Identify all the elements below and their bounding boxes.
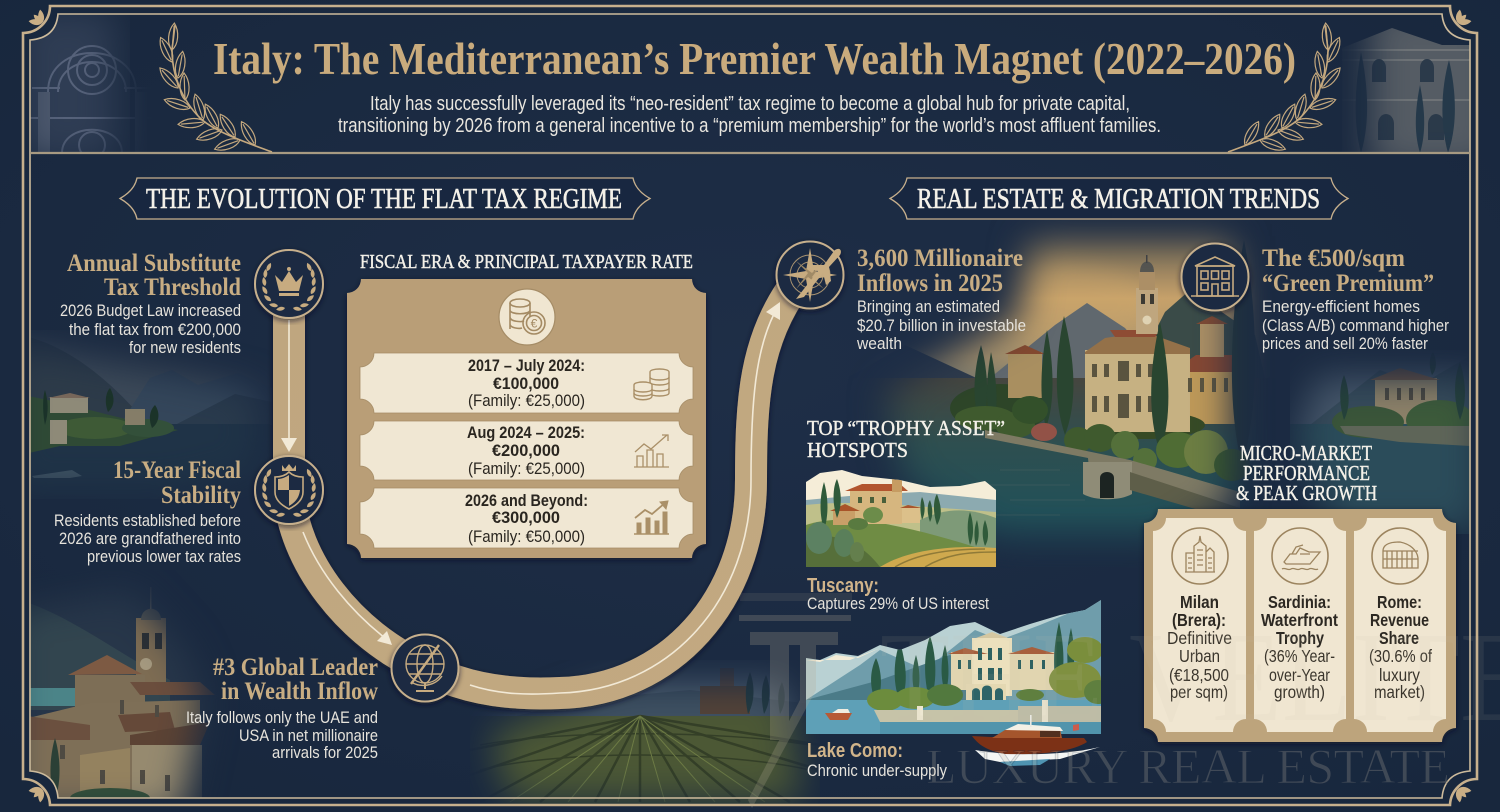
- banner: flat tax heading: [120, 178, 650, 219]
- watermark logo: [739, 593, 852, 808]
- icon: wooden motorboat: [972, 715, 1100, 766]
- row: Aug 2024 to 2025: (Family: €25,000): [468, 459, 585, 478]
- row: 2017 to July 2024: €100,000: [493, 374, 559, 393]
- text block: lake como: Chronic under-supply: [807, 762, 948, 780]
- text block: global leader in wealth inflow: arrivals for 2025: [272, 744, 378, 762]
- text block: millionaire inflows: 3,600 Millionaire: [857, 245, 1023, 272]
- banner: real estate heading: REAL ESTATE & MIGRATION TRENDS: [917, 183, 1320, 215]
- scene: vineyard: [481, 668, 812, 804]
- text block: 15-year fiscal stability: Stability: [161, 482, 241, 509]
- icon: villa medallion: [1182, 244, 1248, 310]
- heading: fiscal era: FISCAL ERA & PRINCIPAL TAXPAYER RATE: [360, 251, 693, 273]
- icon: crown medallion: [255, 250, 323, 318]
- icon: globe medallion: [392, 634, 458, 702]
- laurel: right header: [1228, 23, 1343, 153]
- card: sardinia: Trophy: [1276, 628, 1324, 648]
- illustration: lake como: [806, 600, 1112, 735]
- heading: micro-market performance: [1236, 441, 1377, 505]
- text block: global leader in wealth inflow: USA in net millionaire: [239, 727, 378, 745]
- row: Aug 2024 to 2025: €200,000: [492, 441, 560, 460]
- heading: trophy hotspots: [807, 416, 1005, 462]
- text block: annual substitute tax threshold: for new residents: [129, 339, 241, 357]
- banner: real estate heading: [890, 178, 1348, 219]
- row: Aug 2024 to 2025: [360, 421, 693, 480]
- text block: millionaire inflows: wealth: [856, 335, 902, 353]
- panel: micro-market cards: [1144, 509, 1456, 742]
- card: rome: market): [1374, 682, 1425, 702]
- card: sardinia: Sardinia:: [1268, 592, 1331, 612]
- text block: millionaire inflows: [856, 245, 1026, 353]
- text block: annual substitute tax threshold: Tax Threshold: [104, 274, 241, 301]
- heading: micro-market performance: MICRO-MARKET: [1240, 441, 1372, 465]
- text block: 15-year fiscal stability: Residents established before: [54, 512, 241, 530]
- card: milan: Urban: [1179, 646, 1220, 666]
- card: sardinia: (36% Year-: [1264, 646, 1335, 666]
- text block: lake como: Lake Como:: [807, 740, 903, 762]
- icon: coin stack: €: [531, 316, 538, 330]
- text block: green premium: The €500/sqm: [1262, 245, 1405, 272]
- title: Italy: The Mediterranean’s Premier Wealth Magnet (2022–2026): [213, 33, 1296, 84]
- card: sardinia: [1254, 518, 1346, 732]
- text block: tuscany: Captures 29% of US interest: [807, 595, 989, 613]
- scene: left lake: [30, 339, 260, 478]
- panel: tax rate table: [347, 279, 706, 558]
- illustration: tuscany: [806, 468, 996, 568]
- banner: flat tax heading: THE EVOLUTION OF THE FLAT TAX REGIME: [146, 183, 622, 215]
- text block: tuscany: [807, 575, 989, 613]
- text block: tuscany: Tuscany:: [807, 575, 879, 597]
- card: rome: [1354, 518, 1446, 732]
- icon: compass and plane medallion: [776, 242, 844, 308]
- text block: green premium: “Green Premium”: [1262, 270, 1434, 297]
- text block: green premium: prices and sell 20% faster: [1262, 335, 1428, 353]
- scene: bottom left town: [30, 587, 214, 798]
- card: rome: (30.6% of: [1369, 646, 1432, 666]
- card: milan: per sqm): [1170, 682, 1228, 702]
- text block: global leader in wealth inflow: in Wealth Inflow: [221, 678, 378, 705]
- card: milan: (Brera):: [1172, 610, 1226, 630]
- text block: green premium: [1262, 245, 1449, 353]
- row: Aug 2024 to 2025: Aug 2024 – 2025:: [467, 423, 585, 442]
- icon: city towers: [1172, 528, 1228, 584]
- row: 2017 to July 2024: (Family: €25,000): [468, 391, 585, 410]
- card: rome: Share: [1379, 628, 1419, 648]
- text block: annual substitute tax threshold: Annual Substitute: [67, 250, 241, 277]
- card: sardinia: over-Year: [1269, 665, 1330, 685]
- scene: central villa on the lake: [881, 220, 1260, 548]
- laurel: left header: [157, 23, 272, 153]
- text block: 15-year fiscal stability: 15-Year Fiscal: [113, 457, 241, 484]
- card: sardinia: Waterfront: [1261, 610, 1338, 630]
- heading: trophy hotspots: HOTSPOTS: [807, 438, 908, 462]
- card: milan: [1153, 518, 1246, 732]
- card: sardinia: growth): [1274, 682, 1325, 702]
- text block: annual substitute tax threshold: 2026 Budget Law increased: [60, 302, 241, 320]
- text block: global leader in wealth inflow: #3 Global Leader: [213, 654, 378, 681]
- timeline path with arrows: [281, 284, 795, 694]
- text block: 15-year fiscal stability: previous lower tax rates: [87, 548, 241, 566]
- text block: millionaire inflows: Inflows in 2025: [857, 270, 1003, 297]
- subtitle: Italy has successfully leveraged its “neo-resident” tax regime to become a global hub for private capital,: [370, 92, 1130, 115]
- card: milan: Milan: [1180, 592, 1219, 612]
- row: 2017 to July 2024: [360, 353, 693, 413]
- icon: yacht: [1272, 528, 1328, 584]
- row: 2026 and beyond: [360, 488, 693, 548]
- text block: annual substitute tax threshold: [60, 250, 241, 357]
- heading: trophy hotspots: TOP “TROPHY ASSET”: [807, 416, 1005, 440]
- card: rome: Revenue: [1370, 610, 1429, 630]
- row: 2026 and beyond: 2026 and Beyond:: [465, 491, 588, 510]
- text block: global leader in wealth inflow: [186, 654, 378, 762]
- subtitle: transitioning by 2026 from a general incentive to a “premium membership” for the world’s most affluent families.: [338, 114, 1161, 137]
- icon: colosseum: [1372, 528, 1428, 584]
- watermark text: LUXURY REAL ESTATE: [926, 738, 1450, 794]
- heading: micro-market performance: & PEAK GROWTH: [1236, 481, 1377, 505]
- row: 2026 and beyond: (Family: €50,000): [468, 527, 585, 546]
- card: rome: Rome:: [1377, 592, 1422, 612]
- scene: header colosseum right: [1342, 28, 1470, 153]
- text block: annual substitute tax threshold: the flat tax from €200,000: [69, 321, 241, 339]
- text block: millionaire inflows: Bringing an estimated: [857, 298, 1000, 316]
- text block: green premium: (Class A/B) command higher: [1262, 317, 1449, 335]
- subtitle: [338, 92, 1161, 137]
- text block: lake como: [807, 740, 948, 780]
- icon: shield medallion: [255, 456, 323, 524]
- text block: green premium: Energy-efficient homes: [1262, 298, 1420, 316]
- row: 2026 and beyond: €300,000: [492, 508, 560, 527]
- text block: global leader in wealth inflow: Italy follows only the UAE and: [186, 709, 378, 727]
- text block: millionaire inflows: $20.7 billion in investable: [857, 317, 1026, 335]
- scene: header arch left: [30, 15, 134, 152]
- card: milan: Definitive: [1167, 628, 1232, 648]
- heading: micro-market performance: PERFORMANCE: [1243, 461, 1370, 485]
- text block: 15-year fiscal stability: 2026 are grandfathered into: [59, 530, 241, 548]
- scene: right villa: [1290, 362, 1470, 534]
- card: rome: luxury: [1379, 665, 1420, 685]
- text block: 15-year fiscal stability: [54, 457, 241, 566]
- row: 2017 to July 2024: 2017 – July 2024:: [468, 356, 585, 375]
- icon: coin stack: [499, 289, 555, 345]
- card: milan: (€18,500: [1169, 665, 1229, 685]
